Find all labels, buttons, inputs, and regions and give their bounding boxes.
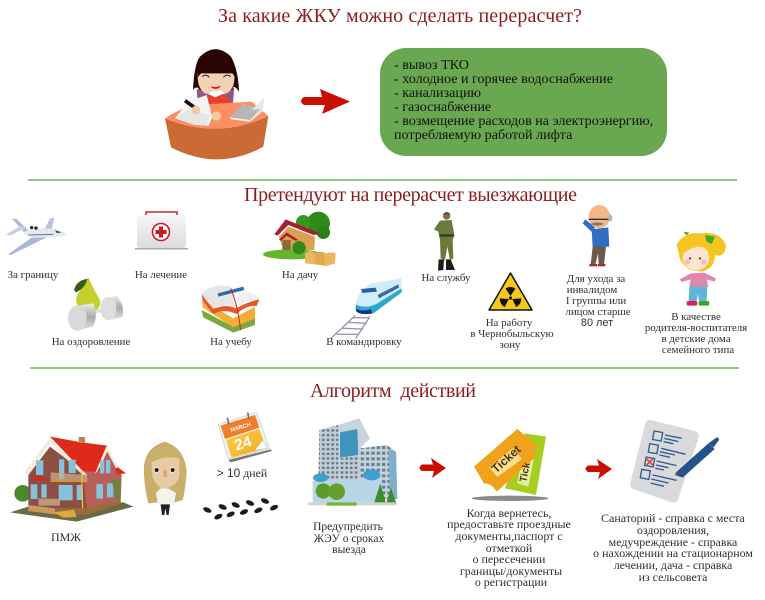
icon: office building <box>308 418 397 506</box>
icon: elderly man <box>583 205 612 266</box>
label <box>645 311 747 356</box>
label: На лечение <box>135 269 187 281</box>
label: В качестве <box>671 311 721 323</box>
icon: train <box>331 278 402 338</box>
icon: soldier <box>434 212 455 271</box>
label <box>470 317 554 351</box>
label: выезда <box>332 544 366 556</box>
label: лечении, дача - справка <box>614 558 733 572</box>
icon: radiation warning sign <box>489 273 532 310</box>
label: лицом старше <box>565 306 631 318</box>
title: За какие ЖКУ можно сделать перерасчет? <box>218 5 582 27</box>
label: родителя-воспитателя <box>645 322 747 334</box>
label: I группы или <box>566 295 626 307</box>
label: На оздоровление <box>52 336 130 348</box>
label: За границу <box>8 269 59 281</box>
label: о нахождении на стационарном <box>593 546 753 560</box>
label <box>565 273 631 329</box>
heading: algorithm: Алгоритм действий <box>310 380 476 402</box>
icon: tickets: Ticket <box>489 442 524 476</box>
label: > 10 дней <box>217 466 268 480</box>
icon: blonde woman <box>144 442 187 515</box>
arrow: step 2 <box>420 458 446 478</box>
label <box>447 506 571 589</box>
label: документы,паспорт с <box>455 529 563 543</box>
list text: - холодное и горячее водоснабжение <box>394 71 613 87</box>
label: На работу <box>486 317 533 329</box>
label: Для ухода за <box>567 273 625 285</box>
icon: country house with boxes <box>263 212 336 266</box>
icon: woman at desk <box>165 49 268 159</box>
icon: calendar: MARCH <box>230 422 252 434</box>
icon: family house <box>10 437 133 522</box>
label <box>593 511 753 584</box>
label: Когда вернетесь, <box>467 506 551 520</box>
label: медучреждение - справка <box>609 535 738 549</box>
label: ПМЖ <box>51 530 81 544</box>
list text: потребляемую работой лифта <box>394 127 573 143</box>
label: границы/документы <box>460 564 562 578</box>
label: из сельсовета <box>639 570 708 584</box>
label: В командировку <box>326 336 402 348</box>
icon: airplane <box>6 218 67 255</box>
icon: calendar <box>218 412 272 462</box>
icon: pear and dumbbell <box>68 278 123 331</box>
list text: - газоснабжение <box>394 99 491 115</box>
label: ЖЭУ о сроках <box>314 533 384 545</box>
heading: applicants: Претендуют на перерасчет выезжающие <box>244 184 577 206</box>
icon: little girl <box>677 232 726 306</box>
label: На службу <box>422 272 471 284</box>
icon: tickets <box>472 429 548 501</box>
label <box>313 521 384 556</box>
list text: - возмещение расходов на электроэнергию, <box>394 113 653 129</box>
label: семейного типа <box>662 344 734 356</box>
icon: footprints <box>202 497 279 521</box>
label: в Чернобыльскую <box>470 328 554 340</box>
panel: list of utilities <box>380 48 667 156</box>
label: инвалидом <box>567 284 617 296</box>
label: 80 лет <box>581 317 613 329</box>
label: Предупредить <box>313 521 383 533</box>
icon: tickets: Tick <box>518 461 533 483</box>
label: о пересечении <box>473 552 546 566</box>
list text: - канализацию <box>394 85 481 101</box>
icon: checklist and pen <box>630 420 719 502</box>
arrow: to list <box>301 89 350 114</box>
label: оздоровления, <box>637 523 709 537</box>
label: предоставьте проездные <box>447 517 571 531</box>
label: о регистрации <box>475 575 548 589</box>
label: зону <box>500 339 521 351</box>
arrow: step 3 <box>586 459 612 479</box>
label: отметкой <box>486 541 533 555</box>
label: На учебу <box>210 336 252 348</box>
icon: first aid kit <box>135 212 188 250</box>
icon: calendar: 24 <box>233 433 254 454</box>
icon: stack of books <box>202 285 259 333</box>
label: Санаторий - справка с места <box>601 511 746 525</box>
label: На дачу <box>282 269 319 281</box>
list text: - вывоз ТКО <box>394 57 469 73</box>
list text <box>394 57 653 143</box>
label: в детские дома <box>661 333 731 345</box>
